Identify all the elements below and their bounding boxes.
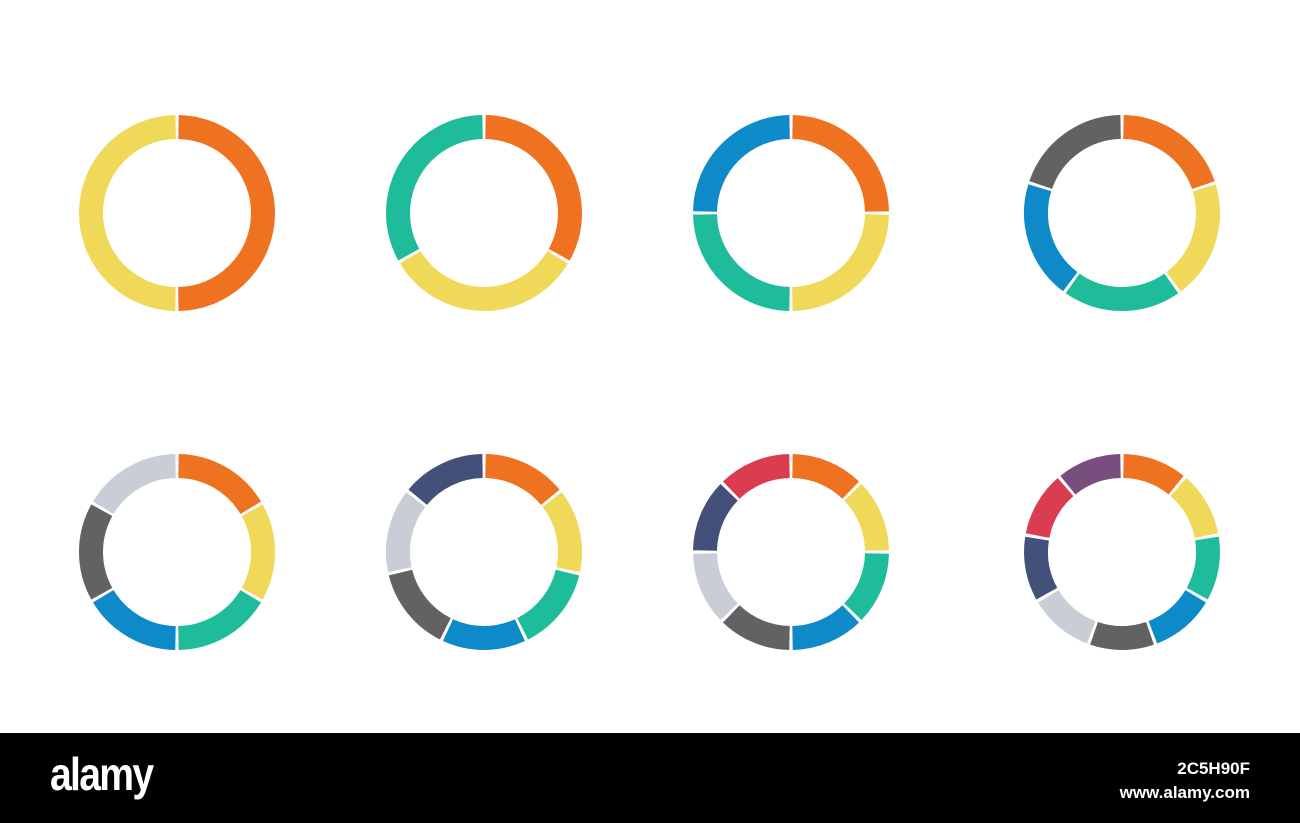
image id	[1120, 759, 1250, 802]
ring 2: 3 segments	[366, 95, 602, 331]
ring 8: 9 segments	[1001, 431, 1243, 673]
ring 1: 2 segments	[90, 126, 264, 300]
ring 4: 5 segments	[1002, 93, 1242, 333]
image id: www.alamy.com	[1120, 783, 1250, 802]
footer bar	[0, 733, 1300, 823]
logo: alamy	[50, 748, 152, 800]
ring 7: 8 segments	[669, 430, 913, 674]
ring 3: 4 segments	[704, 126, 878, 300]
ring 5: 6 segments	[59, 434, 295, 670]
image id: 2C5H90F	[1177, 759, 1250, 778]
ring 6: 7 segments	[363, 431, 605, 673]
